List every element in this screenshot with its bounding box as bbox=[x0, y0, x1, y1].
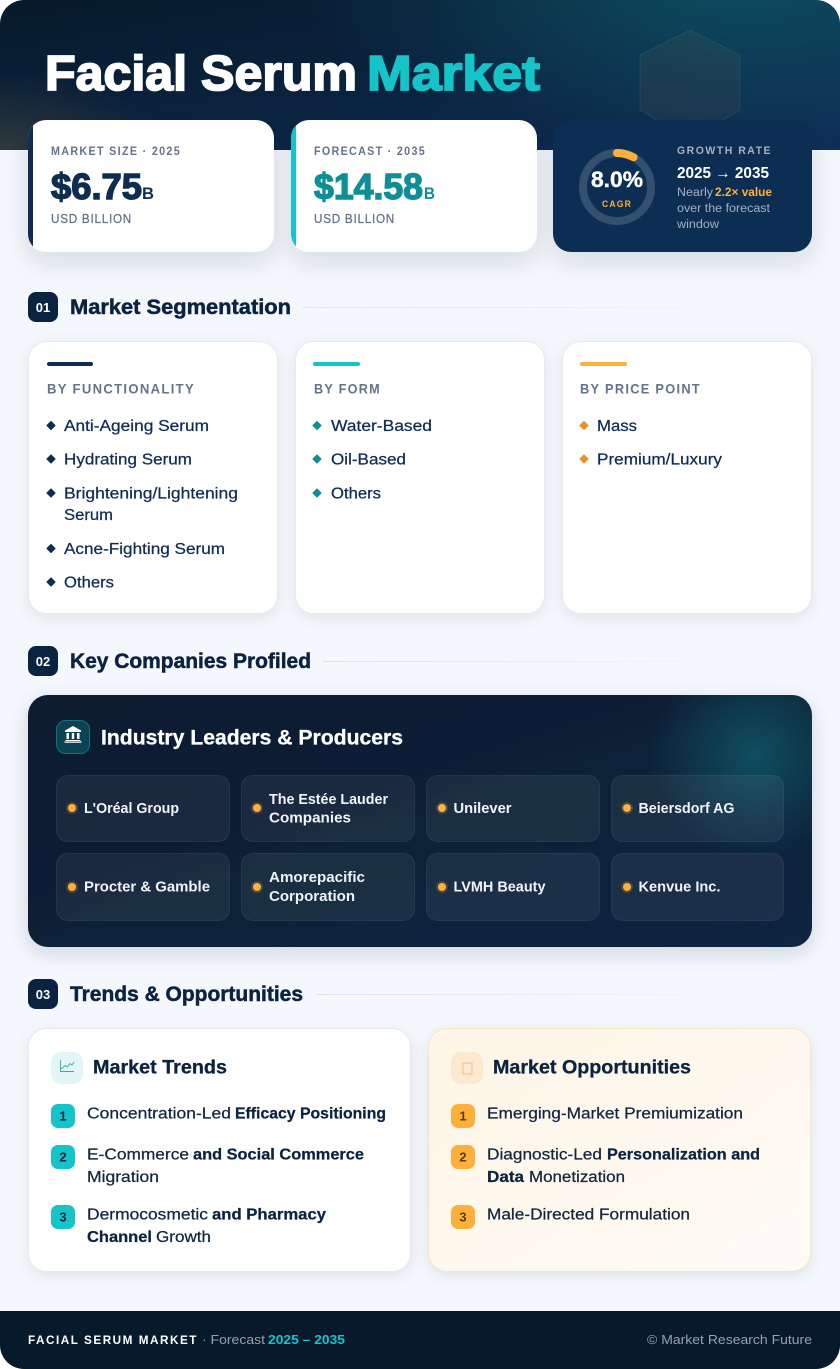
section heading 01 bbox=[28, 292, 740, 322]
section heading 03: 03 bbox=[36, 987, 50, 1002]
trend 1: 1 bbox=[59, 1108, 67, 1124]
trend 3: and Pharmacy bbox=[212, 1206, 326, 1224]
trend 2: and Social Commerce bbox=[193, 1146, 364, 1164]
opportunity 2: 2 bbox=[459, 1150, 467, 1164]
opportunity 3: 3 bbox=[459, 1210, 467, 1224]
trend 3 bbox=[51, 1205, 326, 1246]
panel: by functionality bbox=[28, 342, 278, 614]
trend 1: Efficacy Positioning bbox=[235, 1106, 386, 1122]
panel: key companies bbox=[28, 695, 812, 947]
panel: by price point: Mass bbox=[597, 418, 637, 435]
opportunity 2: Monetization bbox=[529, 1169, 625, 1186]
stat card: market size 2025: USD BILLION bbox=[51, 212, 132, 226]
section heading 03: Trends & Opportunities bbox=[70, 983, 303, 1006]
panel: by price point bbox=[562, 342, 812, 614]
stat card: market size 2025: MARKET SIZE · 2025 bbox=[51, 146, 181, 158]
panel: by functionality: Hydrating Serum bbox=[64, 452, 192, 468]
footer: 2025 – 2035 bbox=[268, 1333, 345, 1347]
company: Beiersdorf AG: Beiersdorf AG bbox=[638, 801, 734, 817]
panel: by form: Oil-Based bbox=[331, 452, 406, 468]
panel: market trends: Market Trends bbox=[93, 1058, 227, 1078]
CAGR ring: CAGR bbox=[602, 199, 632, 209]
icon: bank building bbox=[56, 720, 90, 754]
opportunity 2: Personalization and bbox=[607, 1146, 760, 1164]
panel: market trends bbox=[28, 1028, 410, 1272]
stat card: forecast 2035: FORECAST · 2035 bbox=[314, 146, 426, 158]
growth text: 2.2× value bbox=[715, 187, 772, 199]
section heading 03 bbox=[28, 979, 740, 1009]
panel: by functionality: Anti-Ageing Serum bbox=[64, 418, 209, 435]
footer: · Forecast bbox=[202, 1333, 266, 1347]
stat card: growth rate bbox=[553, 120, 812, 252]
panel: by functionality: Acne-Fighting Serum bbox=[64, 541, 225, 558]
panel: by functionality: BY FUNCTIONALITY bbox=[47, 380, 195, 396]
icon: trend chart bbox=[51, 1052, 83, 1084]
trend 2: E-Commerce bbox=[87, 1146, 189, 1164]
trend 3: Growth bbox=[156, 1229, 211, 1246]
panel: market opportunities: Market Opportunities bbox=[493, 1058, 691, 1078]
company: Unilever: Unilever bbox=[454, 801, 512, 817]
panel: by price point: BY PRICE POINT bbox=[580, 380, 701, 396]
trend 2 bbox=[51, 1145, 364, 1186]
company: LVMH Beauty: LVMH Beauty bbox=[454, 880, 546, 896]
stat card: forecast 2035: USD BILLION bbox=[314, 212, 395, 226]
title: Market bbox=[367, 47, 540, 101]
CAGR ring: 8.0% bbox=[591, 167, 643, 192]
company: Procter & Gamble: Procter & Gamble bbox=[84, 880, 210, 896]
stat card: forecast 2035: $14.58 bbox=[314, 166, 423, 207]
panel: by price point: Premium/Luxury bbox=[597, 452, 722, 468]
section heading 02 bbox=[28, 646, 740, 676]
section heading 02: Key Companies Profiled bbox=[70, 650, 311, 673]
header banner bbox=[0, 0, 840, 150]
opportunity 1: Emerging-Market Premiumization bbox=[487, 1106, 743, 1122]
company: Estée Lauder: The Estée Lauder bbox=[269, 792, 388, 808]
company: Amorepacific: Amorepacific bbox=[269, 870, 365, 886]
stat card: market size 2025 bbox=[28, 120, 274, 252]
section heading 01: 01 bbox=[36, 300, 50, 315]
growth text: Nearly bbox=[677, 187, 713, 199]
company: Amorepacific: Corporation bbox=[269, 889, 355, 905]
company: Amorepacific bbox=[242, 854, 414, 920]
section heading 01: Market Segmentation bbox=[70, 296, 291, 319]
section heading 02: 02 bbox=[36, 654, 50, 669]
stat card: forecast 2035 bbox=[291, 120, 537, 252]
panel: by functionality: Serum bbox=[64, 507, 113, 524]
panel: by functionality: Brightening/Lightening bbox=[64, 486, 238, 502]
opportunity 2: Diagnostic-Led bbox=[487, 1146, 602, 1164]
company: Estée Lauder: Companies bbox=[269, 810, 351, 826]
panel: by functionality: Others bbox=[64, 574, 114, 592]
stat card: forecast 2035: B bbox=[424, 184, 435, 203]
panel heading: Industry Leaders & Producers bbox=[101, 726, 403, 750]
panel: by form bbox=[296, 342, 544, 614]
trend 3: 3 bbox=[59, 1210, 67, 1224]
opportunity 3: Male-Directed Formulation bbox=[487, 1206, 690, 1224]
icon: placeholder glyph box bbox=[451, 1052, 483, 1084]
footer: © Market Research Future bbox=[647, 1333, 812, 1347]
trend 1 bbox=[51, 1104, 386, 1128]
stat card: market size 2025: $6.75 bbox=[51, 166, 142, 207]
stat card: market size 2025: B bbox=[142, 184, 154, 203]
growth text: 2025 → 2035 bbox=[677, 165, 769, 182]
company: Unilever bbox=[426, 776, 600, 842]
title bbox=[45, 47, 540, 101]
company: Procter & Gamble bbox=[56, 854, 230, 920]
company: Kenvue Inc. bbox=[612, 854, 784, 920]
growth text: over the forecast bbox=[677, 203, 771, 215]
panel: by form: Others bbox=[331, 486, 381, 502]
company: L'Oréal Group: L'Oréal Group bbox=[84, 801, 179, 817]
panel: by form: Water-Based bbox=[331, 418, 432, 435]
trend 1: Concentration-Led bbox=[87, 1106, 231, 1122]
company: LVMH Beauty bbox=[426, 854, 600, 920]
trend 3: Channel bbox=[87, 1229, 152, 1246]
footer bbox=[0, 1311, 840, 1369]
panel: by form: BY FORM bbox=[314, 380, 381, 396]
opportunity 1: 1 bbox=[459, 1108, 467, 1124]
company: Beiersdorf AG bbox=[612, 776, 784, 842]
footer: FACIAL SERUM MARKET bbox=[28, 1335, 198, 1347]
growth text: window bbox=[676, 219, 720, 231]
company: Estée Lauder bbox=[242, 776, 414, 842]
trend 3: Dermocosmetic bbox=[87, 1206, 208, 1224]
opportunity 2 bbox=[451, 1145, 760, 1186]
opportunity 3 bbox=[451, 1205, 690, 1229]
trend 2: Migration bbox=[87, 1169, 159, 1186]
title: Facial Serum bbox=[45, 47, 357, 101]
company: L'Oréal Group bbox=[56, 776, 230, 842]
company: Kenvue Inc.: Kenvue Inc. bbox=[638, 880, 720, 896]
growth text bbox=[676, 145, 772, 231]
opportunity 1 bbox=[451, 1104, 743, 1128]
panel: market opportunities bbox=[428, 1028, 810, 1272]
growth text: GROWTH RATE bbox=[677, 145, 772, 157]
CAGR ring bbox=[583, 153, 651, 221]
trend 2: 2 bbox=[59, 1150, 67, 1164]
opportunity 2: Data bbox=[487, 1169, 524, 1186]
